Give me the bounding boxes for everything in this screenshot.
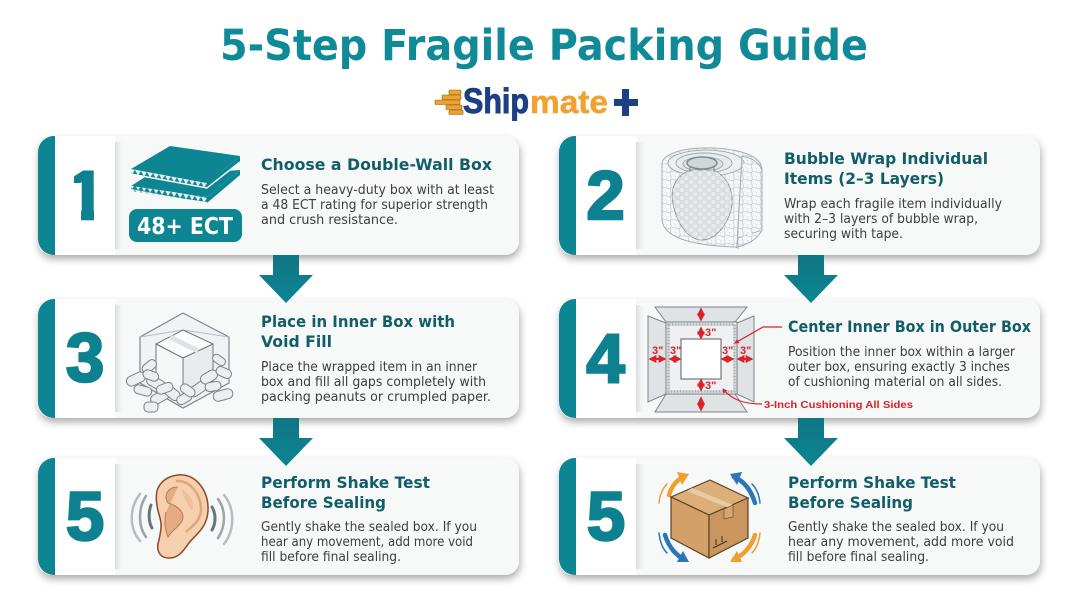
motion arrows [659,477,760,559]
body text: Gently shake the sealed box. If you [788,520,1004,535]
heading: Items (2–3 Layers) [784,169,944,188]
body text: fill before final sealing. [261,550,401,565]
step number 1: 1 [67,157,105,234]
heading: Before Sealing [261,493,386,512]
icon: double-wall cardboard sheets [131,146,240,203]
red measurement arrows [650,309,752,410]
body text: hear any movement, add more void [788,535,1014,550]
arrow: step 3 to 5 [259,418,313,466]
panel: step 5 box [559,458,1040,575]
diagram: inner box centred in outer box [648,307,782,412]
panel: step 4 [559,299,1040,418]
logo: Shipmate+ [435,82,638,121]
body text: Position the inner box within a larger [788,345,1016,360]
body text: hear any movement, add more void [261,535,473,550]
heading: Perform Shake Test [788,473,956,492]
body text [784,197,1002,242]
measurement labels: 3" [670,345,681,357]
heading: Center Inner Box in Outer Box [788,317,1032,336]
body text: Place the wrapped item in an inner [261,360,478,375]
body text: packing peanuts or crumpled paper. [261,390,491,405]
body text: and crush resistance. [261,213,398,228]
measurement labels: 3" [705,327,716,339]
body text: a 48 ECT rating for superior strength [261,198,488,213]
measurement labels: 3" [652,345,663,357]
heading [784,149,988,188]
measurement labels: 3" [705,380,716,392]
measurement labels [652,327,751,392]
body text: Select a heavy-duty box with at least [261,183,494,198]
body text: outer box, ensuring exactly 3 inches [788,360,1010,375]
measurement labels: 3" [740,345,751,357]
heading [261,473,430,512]
step number 4: 4 [586,320,625,397]
arrow: step 2 to 4 [784,255,838,303]
body text: Wrap each fragile item individually [784,197,1002,212]
heading: Place in Inner Box with [261,312,455,331]
step number 2: 2 [586,157,625,234]
body text: box and fill all gaps completely with [261,375,486,390]
heading: Before Sealing [788,493,913,512]
panel: step 5 ear [38,458,519,575]
arrow: step 1 to 3 [259,255,313,303]
body text [261,360,491,405]
step number 5: 5 [587,478,625,555]
panel: step 1 [38,136,519,255]
step number 3: 3 [66,319,104,396]
heading [261,312,455,351]
body text: securing with tape. [784,227,903,242]
heading: Perform Shake Test [261,473,430,492]
heading [788,473,956,512]
arrow: step 4 to 6 [784,418,838,466]
body text: of cushioning material on all sides. [788,375,1002,390]
body text [261,520,477,565]
heading: Bubble Wrap Individual [784,149,988,168]
icon: inner box inside outer box with peanuts [125,313,234,412]
red leader lines [735,327,782,343]
step number 5: 5 [66,478,104,555]
title: 5-Step Fragile Packing Guide [220,21,868,71]
panel: step 3 [38,299,519,418]
body text [788,520,1014,565]
logo: Shipmate+: Ship [463,82,529,121]
body text: with 2–3 layers of bubble wrap, [784,212,978,227]
body text: Gently shake the sealed box. If you [261,520,477,535]
peanuts [125,353,234,412]
logo: Shipmate+: mate [530,84,608,120]
heading: Choose a Double-Wall Box [261,155,493,174]
callout: 3-inch cushioning: 3-Inch Cushioning All Sides [764,399,913,411]
icon: cardboard box with motion arrows [659,472,760,562]
panel: step 2 [559,136,1040,255]
measurement labels: 3" [722,345,733,357]
body text: fill before final sealing. [788,550,929,565]
icon: ear with sound waves [132,475,232,558]
sound waves [132,494,232,544]
icon: logo stack of parcels [435,90,463,114]
icon: vase in bubble wrap roll [662,148,762,248]
heading: Void Fill [261,332,332,351]
body text [788,345,1016,390]
badge: 48+ ECT: 48+ ECT [137,214,233,240]
body text [261,183,494,228]
